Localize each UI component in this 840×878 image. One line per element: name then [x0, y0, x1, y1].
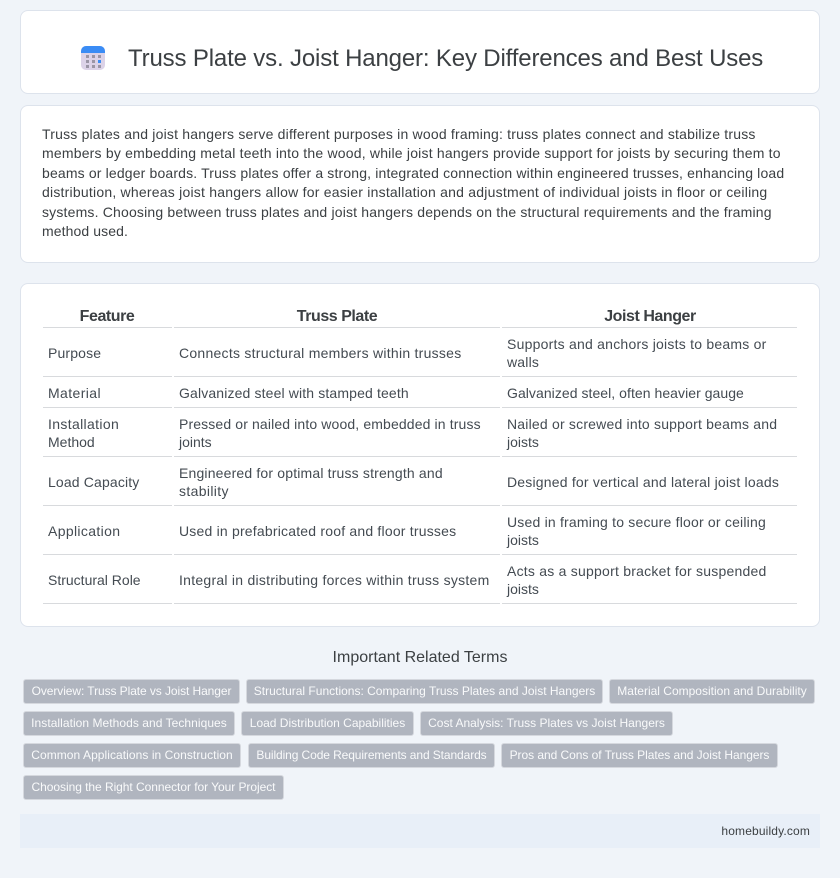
table header: Joist Hanger	[604, 308, 696, 325]
row: application	[48, 514, 766, 548]
tag	[246, 679, 603, 704]
row: structural role: Structural Role	[48, 572, 141, 588]
row: purpose	[48, 336, 767, 370]
row: material	[48, 385, 744, 401]
row: load capacity: Designed for vertical and lateral joist loads	[507, 474, 779, 490]
header panel	[20, 10, 820, 94]
row: structural role	[48, 563, 767, 597]
tag: Cost Analysis: Truss Plates vs Joist Hangers	[428, 716, 665, 730]
row: installation method: Installation	[48, 416, 119, 432]
intro paragraph: method used.	[42, 223, 128, 239]
row: structural role: Acts as a support bracket for suspended	[507, 563, 767, 579]
tag	[23, 775, 284, 800]
icon: calendar app	[81, 46, 105, 70]
tag	[23, 711, 235, 736]
row: purpose: Purpose	[48, 345, 101, 361]
intro paragraph: beams or ledger boards. Truss plates offer a strong, integrated connection within engineered trusses, enhancing load	[42, 165, 784, 181]
row: structural role: Integral in distributing forces within truss system	[179, 572, 490, 588]
tag: Choosing the Right Connector for Your Project	[32, 780, 275, 794]
tag: Building Code Requirements and Standards	[256, 748, 487, 762]
row: installation method: Nailed or screwed into support beams and	[507, 416, 777, 432]
tag: Installation Methods and Techniques	[31, 716, 227, 730]
tag: Material Composition and Durability	[617, 684, 807, 698]
tag: Overview: Truss Plate vs Joist Hanger	[32, 684, 231, 698]
tag: Load Distribution Capabilities	[250, 716, 405, 730]
intro text panel	[20, 105, 820, 263]
table header	[80, 308, 696, 325]
related terms heading: Important Related Terms	[333, 649, 507, 666]
comparison table panel	[20, 283, 820, 627]
intro paragraph: systems. Choosing between truss plates and joist hangers depends on the structural requirements and the framing	[42, 204, 772, 220]
tag	[23, 743, 241, 768]
tag	[609, 679, 815, 704]
tag: Common Applications in Construction	[31, 748, 233, 762]
intro paragraph: Truss plates and joist hangers serve different purposes in wood framing: truss plates connect and stabilize truss	[42, 126, 756, 142]
tag	[23, 679, 240, 704]
tag	[241, 711, 414, 736]
row: load capacity: Load Capacity	[48, 474, 139, 490]
footer credit: homebuildy.com	[721, 824, 810, 838]
tag	[248, 743, 495, 768]
title: Truss Plate vs. Joist Hanger: Key Differences and Best Uses	[128, 45, 763, 72]
row: installation method: Method	[48, 434, 95, 450]
row: application: joists	[507, 532, 539, 548]
tag	[501, 743, 778, 768]
table header: Truss Plate	[297, 308, 377, 325]
row: installation method: joints	[179, 434, 212, 450]
row: application: Used in prefabricated roof and floor trusses	[179, 523, 456, 539]
related terms tags	[23, 679, 815, 800]
intro paragraph: distribution, whereas joist hangers allow for easier installation and adjustment of individual joists in floor or ceiling	[42, 184, 767, 200]
footer bar	[20, 814, 820, 848]
row: material: Galvanized steel, often heavier gauge	[507, 385, 744, 401]
row: application: Used in framing to secure floor or ceiling	[507, 514, 766, 530]
row: structural role: joists	[507, 581, 539, 597]
row: purpose: Connects structural members within trusses	[179, 345, 461, 361]
table header: Feature	[80, 308, 134, 325]
row: material: Galvanized steel with stamped teeth	[179, 385, 409, 401]
row: load capacity: stability	[179, 483, 229, 499]
row: application: Application	[48, 523, 120, 539]
tag: Structural Functions: Comparing Truss Plates and Joist Hangers	[254, 684, 595, 698]
row: installation method: joists	[507, 434, 539, 450]
row: material: Material	[48, 385, 101, 401]
row: purpose: Supports and anchors joists to beams or	[507, 336, 767, 352]
comparison table	[43, 308, 797, 604]
row: purpose: walls	[507, 354, 539, 370]
intro paragraph: members by embedding metal teeth into the wood, while joist hangers provide support for joists by securing them to	[42, 145, 781, 161]
row: load capacity: Engineered for optimal truss strength and	[179, 465, 443, 481]
row: load capacity	[48, 465, 779, 499]
tag: Pros and Cons of Truss Plates and Joist Hangers	[510, 748, 769, 762]
row: installation method	[48, 416, 777, 450]
tag	[420, 711, 673, 736]
intro paragraph	[42, 126, 784, 239]
row: installation method: Pressed or nailed into wood, embedded in truss	[179, 416, 481, 432]
